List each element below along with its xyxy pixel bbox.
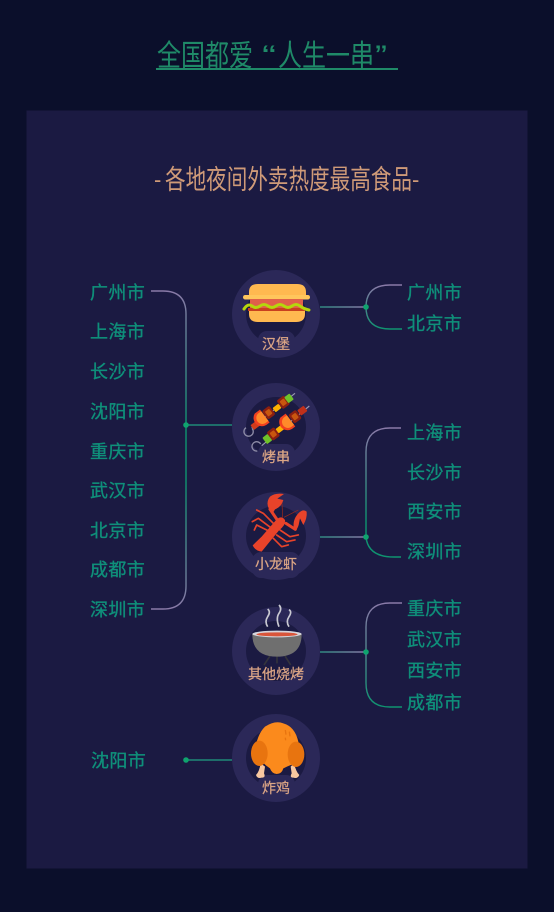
kebab node <box>232 383 320 471</box>
main title: 人生一串 <box>278 40 374 73</box>
left city list: 长沙市 <box>90 362 145 382</box>
subtitle: - <box>154 167 161 192</box>
left city list: 成都市 <box>90 560 145 580</box>
main title: “ <box>262 40 276 73</box>
subtitle: 各地夜间外卖热度最高食品 <box>165 165 412 195</box>
right city list: 西安市 <box>407 661 462 681</box>
right city list: 广州市 <box>407 283 462 303</box>
icon: burger <box>243 284 310 322</box>
connector: Shenyang to fried chicken <box>183 757 232 763</box>
left city list: 重庆市 <box>90 442 145 462</box>
main title: 全国都爱 <box>157 40 253 73</box>
icon: crayfish <box>252 494 307 552</box>
label: kebab: 烤串 <box>262 449 290 465</box>
left city list: 沈阳市 <box>90 402 145 422</box>
main title: ” <box>375 40 387 73</box>
right city list: 重庆市 <box>407 599 462 619</box>
fried chicken node <box>232 714 320 802</box>
main title <box>156 40 398 73</box>
left city list: 北京市 <box>90 521 145 541</box>
label: crayfish: 小龙虾 <box>255 556 297 572</box>
left city list: 广州市 <box>90 283 145 303</box>
burger node <box>232 270 320 358</box>
icon: grill <box>252 605 302 665</box>
Shenyang label: 沈阳市 <box>91 751 146 771</box>
connector: other barbecue to cities <box>320 603 402 707</box>
label: burger: 汉堡 <box>262 336 290 352</box>
right city list: 上海市 <box>407 423 462 443</box>
connector: left cities to kebab <box>151 291 232 609</box>
connector: burger to cities <box>320 285 402 329</box>
left city list: 武汉市 <box>90 481 145 501</box>
left city list: 上海市 <box>90 322 145 342</box>
right city list: 北京市 <box>407 314 462 334</box>
right city list: 深圳市 <box>407 542 462 562</box>
left city list: 深圳市 <box>90 600 145 620</box>
subtitle: - <box>412 167 419 192</box>
icon: kebab skewers <box>244 393 309 451</box>
other barbecue node <box>232 605 320 695</box>
right city list <box>407 283 462 713</box>
right city list: 成都市 <box>407 693 462 713</box>
right city list: 西安市 <box>407 502 462 522</box>
right city list: 武汉市 <box>407 630 462 650</box>
label: fried chicken: 炸鸡 <box>262 780 290 796</box>
crayfish node <box>232 492 320 580</box>
left city list <box>90 283 145 620</box>
label: other barbecue: 其他烧烤 <box>248 666 304 682</box>
icon: fried chicken <box>251 722 304 778</box>
panel: night takeaway foods <box>26 110 528 868</box>
right city list: 长沙市 <box>407 463 462 483</box>
connector: crayfish to cities <box>320 428 401 557</box>
